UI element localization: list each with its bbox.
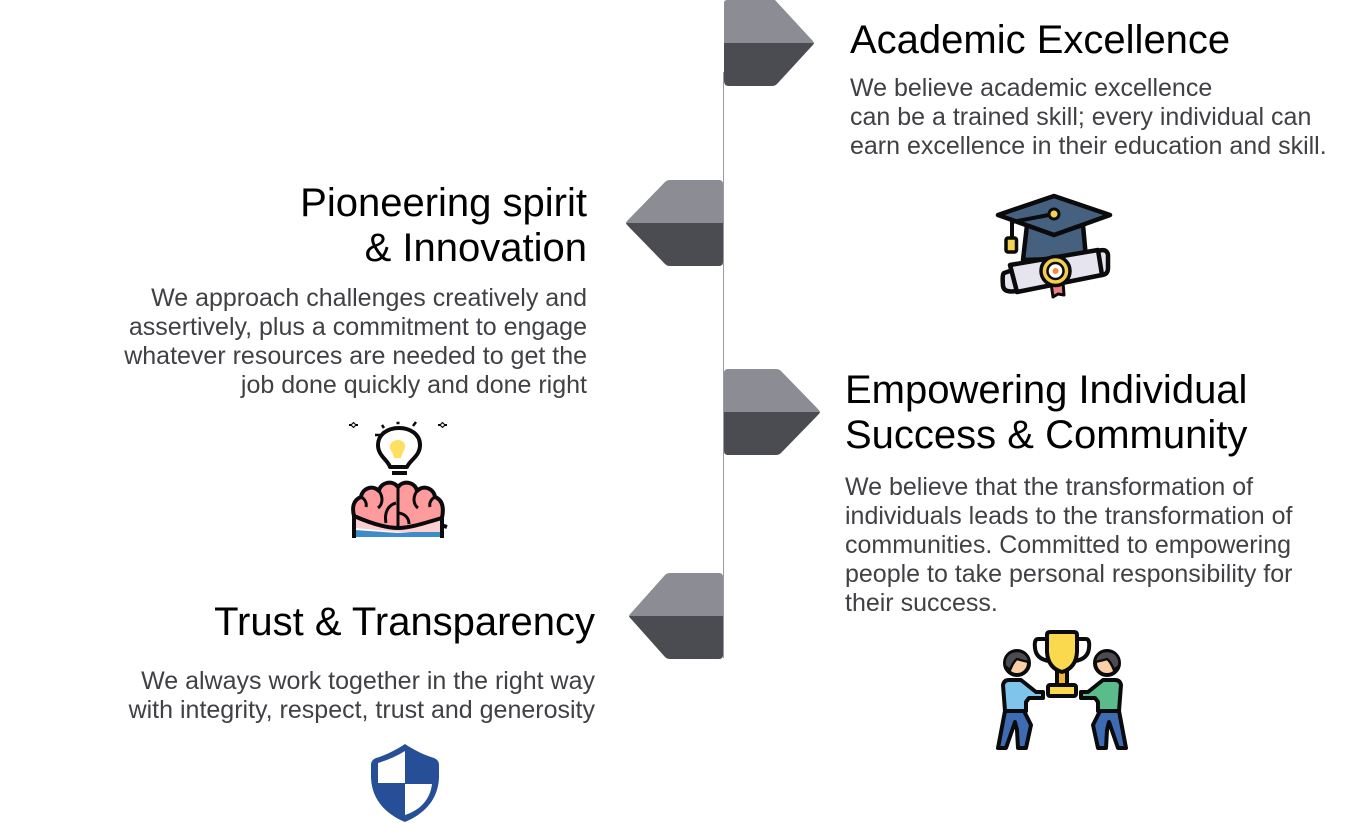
- arrow marker: trust and transparency: [629, 573, 723, 659]
- heading: Trust and Transparency: Trust & Transparency: [214, 600, 595, 644]
- text: pioneering spirit description: assertively, plus a commitment to engage: [129, 313, 587, 341]
- text: academic excellence description: can be a trained skill; every individual can: [850, 103, 1311, 131]
- heading: Empowering Individual Success and Community: Success & Community: [845, 413, 1247, 457]
- icon: graduation cap and diploma: [996, 194, 1112, 298]
- text: empowering individual description: We believe that the transformation of: [845, 473, 1253, 501]
- text: academic excellence description: earn excellence in their education and skill.: [850, 132, 1327, 160]
- heading: Pioneering spirit and Innovation: [300, 181, 587, 270]
- heading: Academic Excellence: Academic Excellence: [850, 18, 1230, 62]
- heading: Pioneering spirit and Innovation: & Innovation: [365, 226, 587, 270]
- text: academic excellence description: We believe academic excellence: [850, 74, 1212, 102]
- arrow marker: empowering individual: [724, 369, 820, 455]
- text: trust and transparency description: [128, 667, 595, 724]
- text: trust and transparency description: We always work together in the right way: [141, 667, 595, 695]
- arrow marker: pioneering spirit: [626, 180, 723, 266]
- text: empowering individual description: communities. Committed to empowering: [845, 531, 1291, 559]
- text: pioneering spirit description: job done quickly and done right: [241, 371, 587, 399]
- icon: two people holding a trophy: [996, 630, 1128, 750]
- text: empowering individual description: [845, 473, 1292, 617]
- heading: Pioneering spirit and Innovation: Pioneering spirit: [300, 181, 587, 225]
- text: empowering individual description: their success.: [845, 589, 998, 617]
- heading: Empowering Individual Success and Community: Empowering Individual: [845, 368, 1247, 412]
- text: empowering individual description: individuals leads to the transformation of: [845, 502, 1292, 530]
- icon: light bulb over brain and book: [349, 421, 448, 538]
- text: pioneering spirit description: [124, 284, 587, 399]
- timeline axis line: [723, 72, 724, 658]
- arrow marker: academic excellence: [724, 0, 814, 86]
- text: trust and transparency description: with integrity, respect, trust and generosity: [129, 696, 595, 724]
- text: pioneering spirit description: whatever resources are needed to get the: [124, 342, 587, 370]
- heading: Empowering Individual Success and Community: [845, 368, 1248, 457]
- text: pioneering spirit description: We approach challenges creatively and: [151, 284, 587, 312]
- text: academic excellence description: [850, 74, 1327, 160]
- text: empowering individual description: people to take personal responsibility for: [845, 560, 1292, 588]
- icon: shield: [371, 744, 439, 822]
